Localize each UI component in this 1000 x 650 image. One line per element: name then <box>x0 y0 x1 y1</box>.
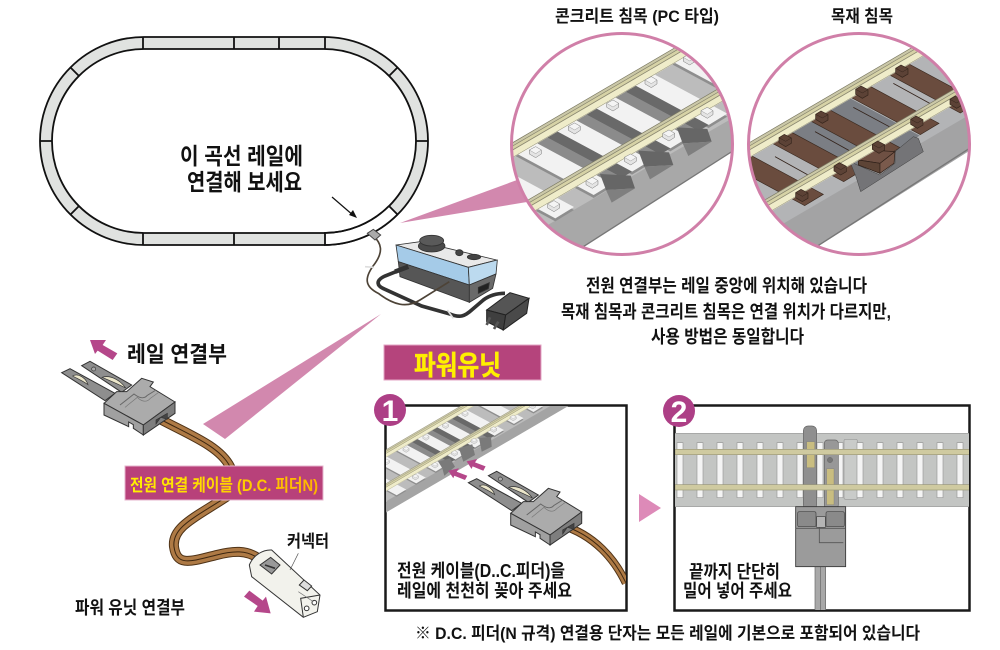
text: step 2 instruction <box>683 562 792 601</box>
panel: step 1 <box>384 404 628 612</box>
banner: power unit <box>384 345 541 381</box>
pink wedge to feeder <box>203 314 381 439</box>
arrow: to power unit <box>244 591 271 613</box>
text: connection note: 사용 방법은 동일합니다 <box>651 327 804 347</box>
icon: controller body <box>396 235 497 302</box>
illustration: power unit with cables <box>365 229 529 330</box>
banner: power unit: 파워유닛 <box>414 351 501 381</box>
heading: wood sleeper: 목재 침목 <box>831 7 893 26</box>
badge: step 1 <box>374 394 406 428</box>
label: power unit side: 파워 유닛 연결부 <box>75 598 185 618</box>
arrow: next step <box>639 494 661 522</box>
text: step 1 instruction: 레일에 천천히 꽂아 주세요 <box>397 581 572 601</box>
badge: step 2: 2 <box>671 396 687 429</box>
label: try this curved rail: 연결해 보세요 <box>187 169 302 195</box>
text: step 2 instruction: 끝까지 단단히 <box>689 562 780 582</box>
illustration: feeder connector and cable <box>62 340 320 617</box>
panel: concrete sleeper detail <box>510 32 734 256</box>
illustration: track with feeder <box>386 406 626 585</box>
label: rail connection: 레일 연결부 <box>127 342 227 367</box>
arrow: to rail <box>90 340 117 360</box>
text: connection note: 전원 연결부는 레일 중앙에 위치해 있습니다 <box>586 276 867 296</box>
icon: brown cable <box>162 420 258 561</box>
icon: track connector <box>367 229 381 240</box>
icon: white connector <box>249 550 320 617</box>
icon: rail connector <box>62 361 175 435</box>
banner: feeder cable: 전원 연결 케이블 (D.C. 피더N) <box>130 476 318 495</box>
icon: adapter <box>487 293 529 330</box>
text: connection note <box>561 276 891 347</box>
pink wedge to concrete detail <box>400 180 527 223</box>
text: step 1 instruction <box>397 561 572 601</box>
text: step 2 instruction: 밀어 넣어 주세요 <box>683 581 792 601</box>
icon: feeder cable <box>367 236 449 305</box>
text: step 1 instruction: 전원 케이블(D..C.피더)을 <box>397 561 565 581</box>
badge: step 2 <box>663 395 695 429</box>
heading: concrete sleeper: 콘크리트 침목 (PC 타입) <box>555 7 719 26</box>
rail oval <box>40 37 428 245</box>
text: connection note: 목재 침목과 콘크리트 침목은 연결 위치가 다르지만, <box>561 302 891 322</box>
label: try this curved rail <box>180 143 303 195</box>
panel: step 2 <box>674 406 970 612</box>
arrow: points to rail joint <box>332 197 357 218</box>
label: connector: 커넥터 <box>287 532 329 551</box>
icon: power cable <box>378 267 505 316</box>
banner: feeder cable <box>125 466 323 500</box>
arrows: insert direction <box>448 459 486 480</box>
illustration: top-view track and feeder <box>675 426 970 612</box>
panel: wood sleeper detail <box>747 32 971 256</box>
label: try this curved rail: 이 곡선 레일에 <box>180 143 303 169</box>
badge: step 1: 1 <box>382 395 398 428</box>
footnote: ※ D.C. 피더(N 규격) 연결용 단자는 모든 레일에 기본으로 포함되어 있습니다 <box>415 624 920 643</box>
